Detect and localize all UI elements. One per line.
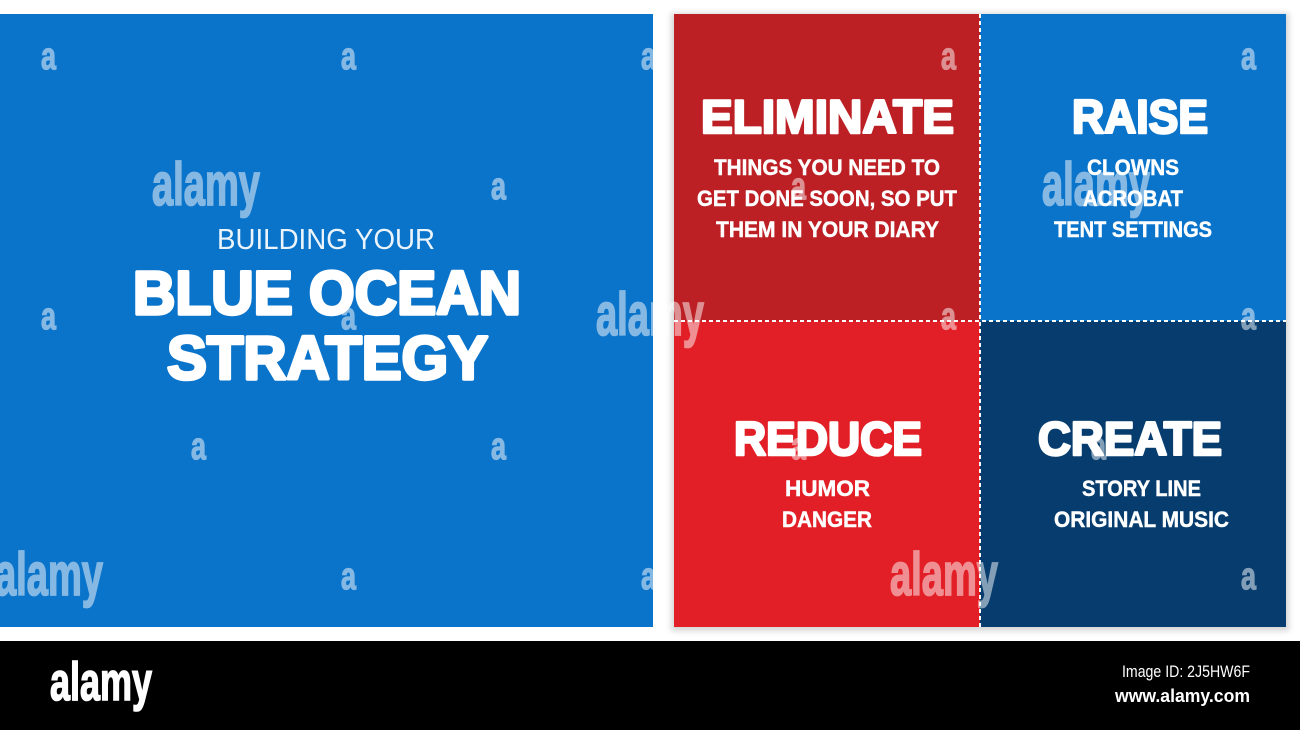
watermark overlay: [0, 36, 1257, 608]
watermark overlay: a: [341, 36, 357, 78]
quadrant: eliminate: [674, 14, 980, 321]
watermark overlay: a: [1241, 556, 1257, 598]
watermark overlay: a: [641, 36, 657, 78]
text block: eliminate description: THINGS YOU NEED TO: [714, 155, 940, 180]
watermark overlay: a: [491, 166, 507, 208]
watermark overlay: alamy: [1042, 151, 1150, 218]
footer bar: [0, 641, 1300, 730]
text block: create items: ORIGINAL MUSIC: [1054, 507, 1229, 532]
watermark overlay: a: [1241, 36, 1257, 78]
heading: raise: RAISE: [1072, 90, 1208, 143]
watermark overlay: a: [641, 556, 657, 598]
text block: create items: [1054, 476, 1229, 532]
title line 1: BLUE OCEAN: [133, 259, 521, 327]
image id: Image ID: 2J5HW6F: [1122, 662, 1250, 681]
watermark overlay: alamy: [152, 151, 260, 218]
title line 2: STRATEGY: [167, 324, 488, 392]
watermark overlay: a: [941, 36, 957, 78]
heading: create: CREATE: [1038, 412, 1222, 465]
watermark overlay: a: [941, 296, 957, 338]
watermark overlay: a: [791, 166, 807, 208]
text block: raise items: ACROBAT: [1083, 186, 1184, 211]
text block: raise items: CLOWNS: [1087, 155, 1179, 180]
watermark overlay: alamy: [596, 281, 704, 348]
watermark overlay: a: [41, 36, 57, 78]
text block: reduce items: HUMOR: [785, 476, 870, 501]
quadrant: create: [980, 321, 1286, 627]
text block: create items: STORY LINE: [1082, 476, 1201, 501]
quadrant: reduce: [674, 321, 980, 627]
watermark overlay: a: [341, 556, 357, 598]
watermark overlay: a: [191, 426, 207, 468]
watermark overlay: a: [1091, 426, 1107, 468]
text block: eliminate description: [697, 155, 958, 242]
text block: raise items: TENT SETTINGS: [1054, 217, 1212, 242]
quadrant: raise: [980, 14, 1286, 321]
text block: eliminate description: GET DONE SOON, SO PUT: [697, 186, 958, 211]
panel: four actions matrix: [671, 13, 1289, 631]
text block: reduce items: [782, 476, 872, 532]
watermark overlay: a: [341, 296, 357, 338]
watermark overlay: a: [41, 296, 57, 338]
watermark overlay: a: [491, 426, 507, 468]
watermark overlay: alamy: [890, 541, 998, 608]
watermark overlay: a: [791, 426, 807, 468]
footer logo: alamy: [50, 652, 152, 712]
watermark overlay: a: [1241, 296, 1257, 338]
website: www.alamy.com: [1114, 686, 1250, 706]
panel: blue ocean title: [0, 14, 653, 627]
text block: raise items: [1054, 155, 1212, 242]
watermark overlay: alamy: [0, 541, 103, 608]
text block: eliminate description: THEM IN YOUR DIARY: [716, 217, 939, 242]
subtitle: BUILDING YOUR: [217, 224, 435, 256]
text block: reduce items: DANGER: [782, 507, 872, 532]
heading: eliminate: ELIMINATE: [701, 90, 954, 143]
heading: reduce: REDUCE: [734, 412, 922, 465]
